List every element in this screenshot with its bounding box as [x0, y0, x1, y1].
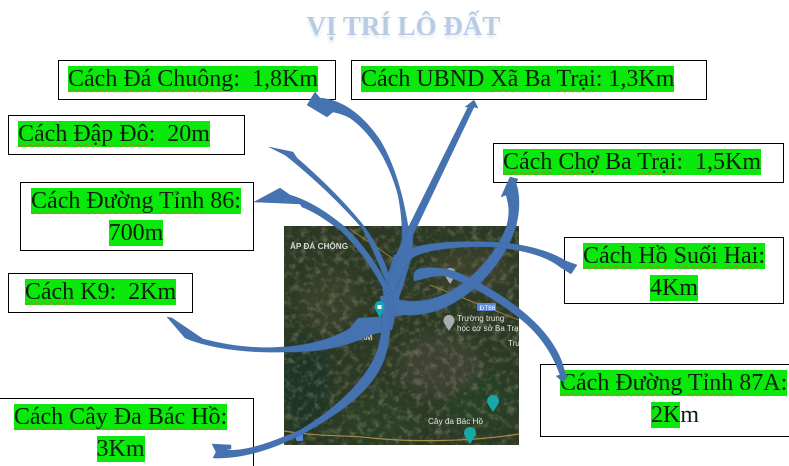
label: K9 distance: Cách K9: 2Km — [25, 279, 176, 305]
label: Đá Chuông distance — [58, 60, 336, 100]
label: Cây Đa Bác Hồ distance: Cách Cây Đa Bác Hồ: 3Km — [14, 404, 227, 462]
label: Đá Chuông distance: Cách Đá Chuông: 1,8Km — [68, 66, 318, 92]
label: Đường Tỉnh 87A distance: Cách Đường Tỉnh 87A: 2Km — [560, 370, 787, 428]
arrow: to Đường Tỉnh 86 — [254, 188, 390, 294]
arrow: to UBND — [382, 100, 478, 295]
arrow: to K9 — [167, 316, 395, 352]
label: Chợ Ba Trại distance: Cách Chợ Ba Trại: 1,5Km — [503, 149, 761, 175]
satellite map with arrows: học cơ sở Ba Trại — [457, 324, 521, 333]
satellite map with arrows — [166, 92, 578, 458]
arrows radiating from the plot — [167, 92, 577, 458]
satellite map with arrows: ẤP ĐÁ CHÔNG — [290, 240, 348, 251]
label: Chợ Ba Trại distance — [493, 143, 784, 183]
satellite map with arrows: XÃ TRÂM — [337, 333, 373, 342]
map pin: plot location — [374, 301, 385, 318]
title: VỊ TRÍ LÔ ĐẤT — [307, 11, 500, 41]
satellite map with arrows: Cây đa Bác Hồ — [428, 417, 484, 426]
label: Đập Đô distance — [8, 115, 245, 155]
label: Đập Đô distance: Cách Đập Đô: 20m — [18, 121, 210, 147]
label: K9 distance — [8, 273, 193, 313]
arrow: to Đập Đô — [269, 147, 394, 296]
satellite map with arrows: ĐT86 — [480, 305, 496, 312]
label: UBND Xã Ba Trại distance: Cách UBND Xã Ba Trại: 1,3Km — [361, 66, 674, 92]
label: Hồ Suối Hai distance: Cách Hồ Suối Hai: 4Km — [583, 243, 765, 301]
arrow: to Đường Tỉnh 87A — [413, 267, 568, 382]
arrow: central hub where arrows converge — [383, 249, 414, 316]
arrow: to Chợ Ba Trại — [393, 177, 519, 315]
arrow: to Hồ Suối Hai — [387, 242, 577, 292]
label: Đường Tỉnh 86 distance: Cách Đường Tỉnh 86: 700m — [31, 188, 241, 246]
arrow: to Đá Chuông — [307, 92, 410, 290]
arrow: to Cây Đa Bác Hồ — [212, 296, 390, 458]
satellite map with arrows: Trư — [508, 339, 521, 348]
label: UBND Xã Ba Trại distance — [351, 60, 707, 100]
satellite map with arrows: Trường trung — [457, 314, 504, 323]
